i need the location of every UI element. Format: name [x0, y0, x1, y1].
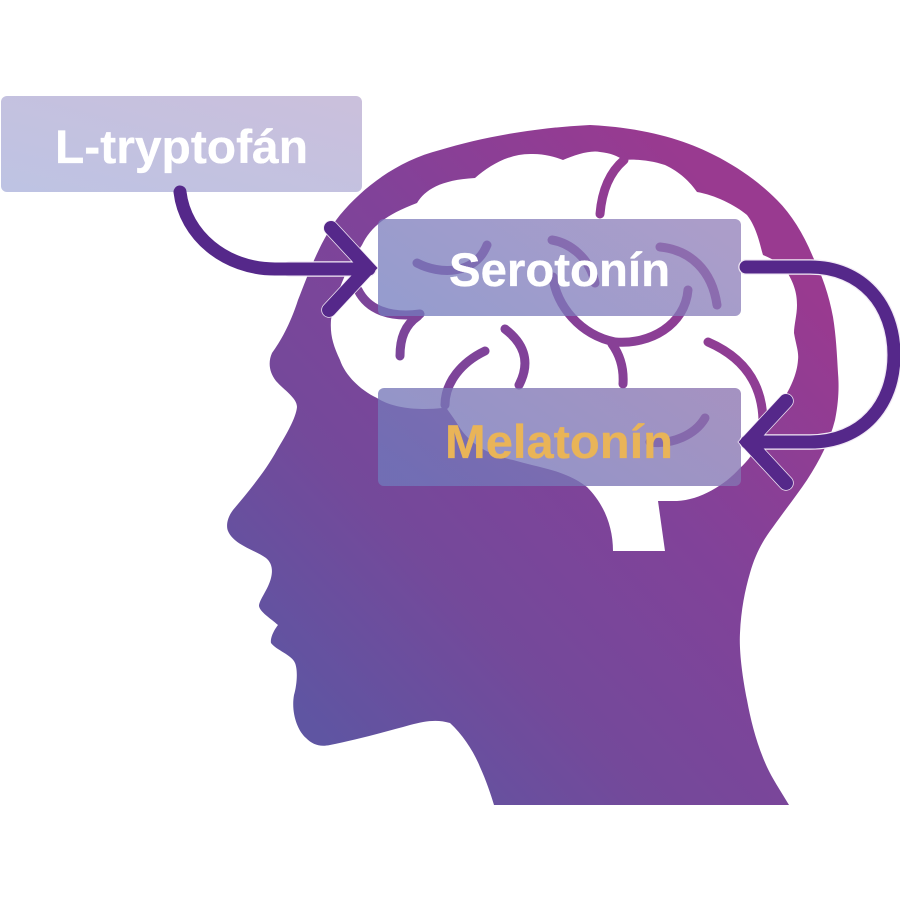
box: Serotonín [378, 219, 741, 316]
brain folds [358, 160, 763, 443]
head silhouette [227, 125, 839, 805]
arrow: Serotonín to Melatonín [746, 267, 894, 483]
box: L-tryptofán [1, 96, 362, 192]
box: Melatonín [378, 388, 741, 486]
brain [331, 152, 798, 551]
arrow: L-tryptofán to Serotonín [180, 192, 369, 310]
label: Melatonín: Melatonín [445, 415, 673, 468]
label: L-tryptofán: L-tryptofán [55, 120, 308, 173]
label: Serotonín: Serotonín [449, 243, 670, 296]
